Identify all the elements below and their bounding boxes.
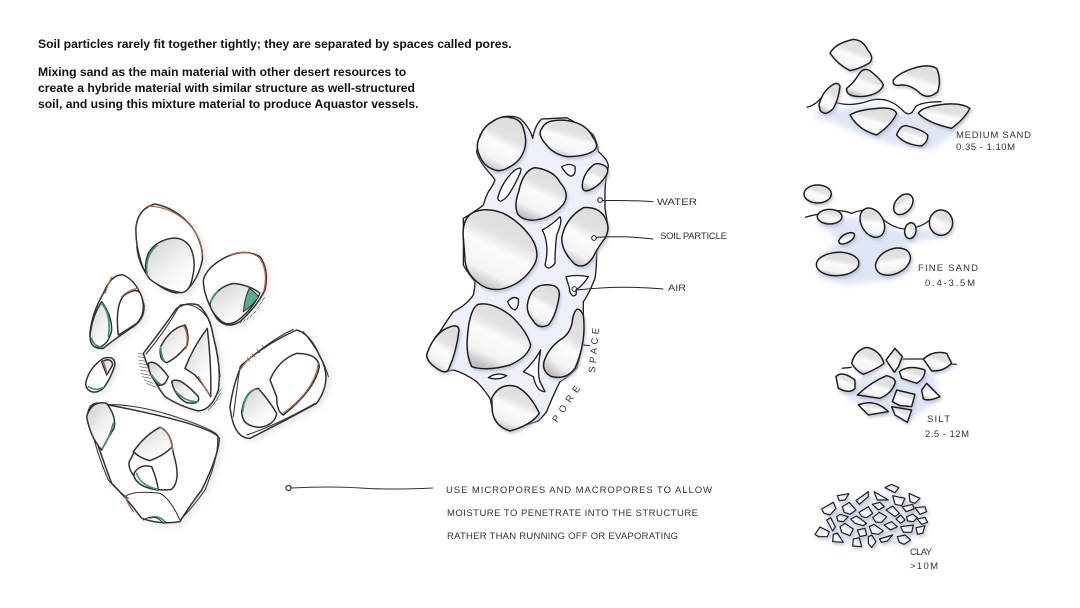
blue water shading <box>812 218 945 285</box>
tick: pore space <box>583 343 590 347</box>
blue water shading <box>815 105 965 150</box>
label: soil particle: SOIL PARTICLE <box>660 231 727 242</box>
center diagram: soil structure with pore space <box>427 116 663 431</box>
text block: mixing sand description: soil, and using this mixture material to produce Aquastor vessels. <box>38 97 419 111</box>
silt <box>836 347 957 422</box>
label: silt: SILT <box>927 414 950 425</box>
stone: left <box>90 275 144 348</box>
text: micropores note: USE MICROPORES AND MACROPORES TO ALLOW <box>446 485 712 496</box>
label: air: AIR <box>668 283 686 294</box>
note: leader line and handwritten text <box>286 485 712 542</box>
stone: bottom large <box>87 403 219 523</box>
left sketch: stones with micropores and macropores <box>86 204 328 523</box>
right column: medium and fine sand <box>804 39 970 285</box>
grains <box>815 484 928 548</box>
text block: mixing sand description <box>38 65 419 111</box>
text: micropores note: MOISTURE TO PENETRATE INTO THE STRUCTURE <box>447 508 698 519</box>
stone: upper right <box>203 252 266 325</box>
stone: small <box>86 357 115 392</box>
grains <box>804 185 953 281</box>
stone: right <box>230 329 328 438</box>
label: clay size: >10M <box>910 561 938 572</box>
fine sand <box>804 185 953 285</box>
text: micropores note <box>446 485 712 542</box>
text block: mixing sand description: create a hybride material with similar structure as well-structured <box>38 81 415 95</box>
leader: soil particle <box>592 236 653 240</box>
label: pore: PORE <box>550 384 583 425</box>
label: fine sand: FINE SAND <box>918 263 978 274</box>
wavy waterline <box>805 210 932 229</box>
clay <box>815 484 928 548</box>
label: space: SPACE <box>587 327 602 373</box>
blue water shading <box>840 372 940 418</box>
leader: water <box>598 198 653 202</box>
label: water: WATER <box>657 197 697 208</box>
label: silt size: 2.5 - 12M <box>925 429 969 440</box>
stone: top <box>136 204 203 293</box>
medium sand <box>807 39 970 150</box>
water body <box>427 116 608 430</box>
wavy waterline <box>807 95 942 114</box>
label: clay: CLAY <box>910 547 933 558</box>
heading: soil particles and pores: Soil particles rarely fit together tightly; they are separated by spaces called pores. <box>38 37 512 51</box>
grains <box>819 39 970 146</box>
air pores <box>488 164 588 392</box>
grains <box>836 347 952 422</box>
label: medium sand size: 0.35 - 1.10M <box>956 142 1015 153</box>
stone: middle with inner cells <box>138 304 221 411</box>
label: fine sand size: 0.4-3.5M <box>925 278 975 289</box>
text: micropores note: RATHER THAN RUNNING OFF OR EVAPORATING <box>447 531 678 542</box>
stones group <box>86 204 328 523</box>
right column: silt and clay <box>815 347 957 548</box>
leader line with dot <box>286 486 433 490</box>
label: medium sand: MEDIUM SAND <box>956 130 1031 141</box>
leader: air <box>572 287 663 291</box>
soil particles <box>427 117 608 431</box>
blue water shading <box>823 495 925 543</box>
waterline <box>842 359 957 368</box>
text block: mixing sand description: Mixing sand as the main material with other desert resources to <box>38 65 406 79</box>
